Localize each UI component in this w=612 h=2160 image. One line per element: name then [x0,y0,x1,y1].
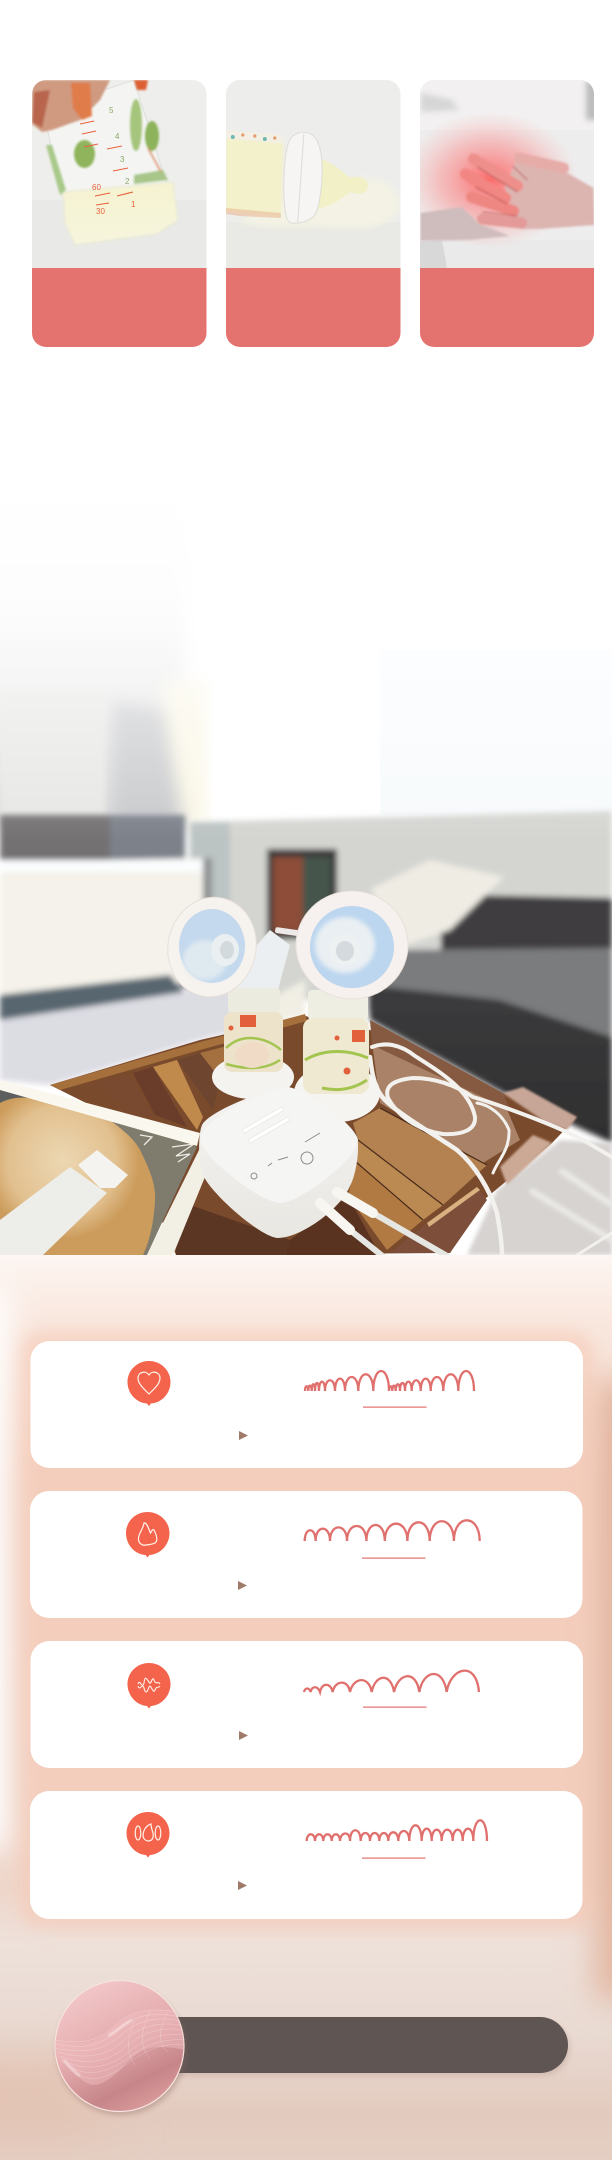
white tube [0,1150,128,1255]
photo card: milk bottle: 2 [125,177,130,186]
dark pill bar [150,2017,570,2076]
bullet arrow [239,1731,248,1740]
photo card: breast pain [420,80,594,347]
magazine [25,1098,197,1255]
left wall with painting [0,666,210,830]
red caption panel [226,268,402,347]
white strip [0,1080,200,1146]
lower section background [0,1255,612,2160]
bullet arrow [238,1581,247,1590]
red caption panel [32,268,208,347]
milk in bottle [63,182,178,245]
product photo [0,666,612,1255]
tan straps [500,1087,577,1185]
blanket [371,860,504,945]
sofa seat [370,948,612,1037]
teat [317,158,368,209]
right flange and bottle [294,891,408,1122]
left slats [93,1075,153,1118]
back right slats [372,1042,520,1163]
bottle trees [74,140,95,168]
scribble [304,1671,479,1692]
scale [80,121,133,205]
scribble [305,1371,474,1391]
spill [252,222,379,226]
wooden table [50,1014,577,1255]
connectors [320,1192,447,1258]
card 1 [30,1341,583,1468]
icon: wave bubble [128,1663,170,1708]
bottle body [226,138,284,215]
sofa back [441,895,612,960]
white console [0,858,203,995]
sofa front [367,985,612,1143]
front slats [353,1108,487,1205]
icon: heart bubble [128,1361,170,1406]
photo card: spilled milk bottle [226,80,402,347]
arm [420,207,510,241]
pump unit [199,1087,358,1238]
glass [48,80,166,197]
photo card: milk bottle [32,80,208,347]
bullet arrow [238,1881,247,1890]
floor right [467,1140,612,1255]
card 2 [30,1491,582,1618]
fade overlay [0,400,612,840]
grey wall [195,811,612,1000]
picture frame [267,849,337,939]
scribble [305,1520,480,1541]
photo card: milk bottle: 60 [92,183,101,192]
card 4 [30,1791,582,1919]
photo card: milk bottle: 3 [120,155,125,164]
photo card: milk bottle: 5 [109,106,114,115]
scribble [307,1820,487,1841]
dark band [0,811,114,864]
card glow [20,1331,594,1929]
photo card: milk bottle: 1 [131,200,136,209]
icon: drops bubble [126,1812,170,1858]
hand [466,158,594,229]
photo card: milk bottle: 30 [96,207,105,216]
wooden tray [0,1098,155,1255]
pink disc [55,1980,186,2115]
window panes [212,670,280,820]
photo card: milk bottle: 4 [115,132,120,141]
card 3 [30,1641,583,1768]
cap [284,132,322,223]
cables [370,1044,612,1255]
icon: flame bubble [126,1512,170,1558]
white sheet [0,988,229,1086]
bullet arrow [239,1431,248,1440]
left flange and bottle [159,889,319,1099]
window wall [0,400,612,830]
table front edge [390,1187,487,1253]
panel LEDs [242,1107,290,1143]
hand [32,80,110,132]
table edge [50,1014,307,1090]
